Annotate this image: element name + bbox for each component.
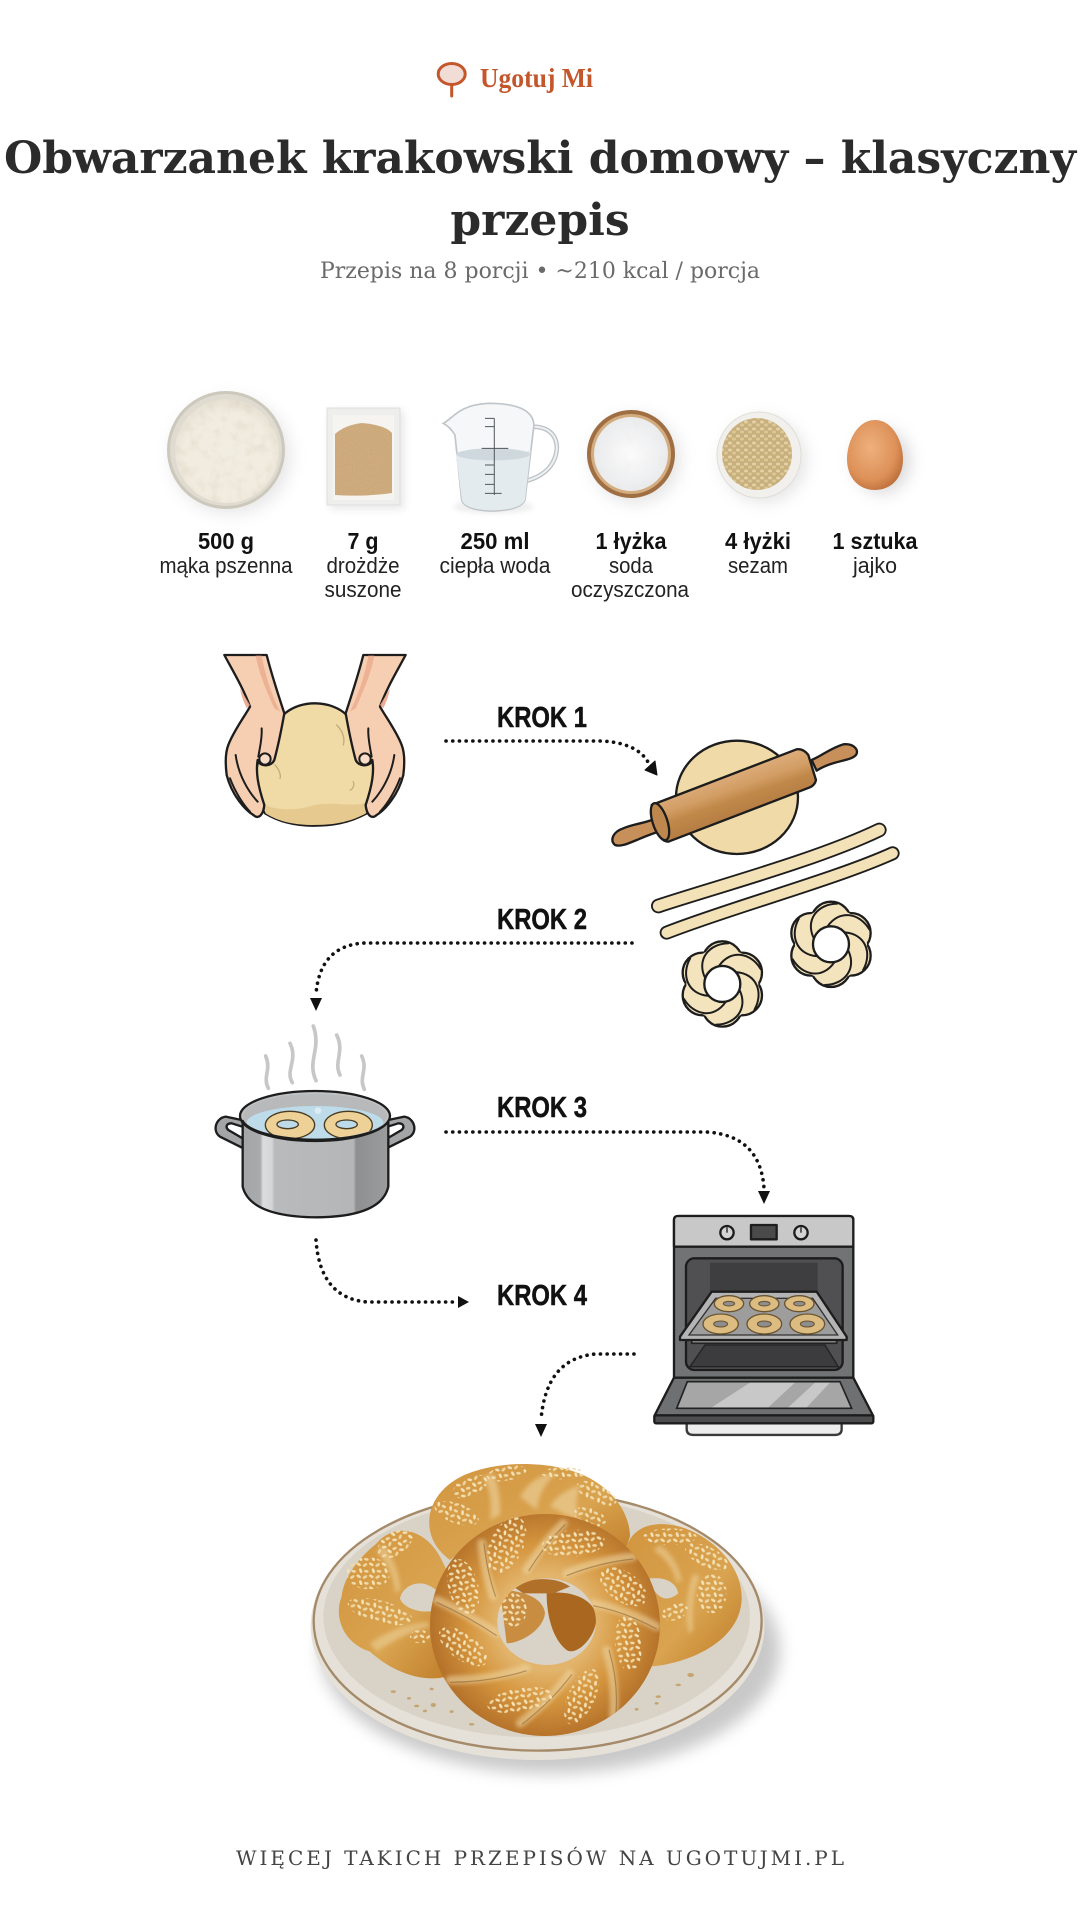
panel: ingredients: [160, 391, 918, 602]
subtitle: Przepis na 8 porcji • ~210 kcal / porcja: [320, 259, 760, 284]
ingredient labels: 1 sztuka: [832, 528, 918, 554]
ingredient labels: soda: [609, 553, 654, 578]
arrow: step 2: [310, 943, 632, 1011]
step label: KROK 3: KROK 3: [497, 1092, 587, 1124]
icon: measuring jug: [443, 403, 557, 513]
bread: left: [339, 1522, 453, 1678]
ingredient labels: 500 g: [198, 528, 254, 554]
ingredient labels: suszone: [324, 577, 402, 602]
ingredient labels: 7 g: [348, 528, 378, 554]
illustration: shaped dough rings: [678, 897, 875, 1032]
arrow: step 3: [446, 1132, 770, 1204]
illustration: rolling pin and dough: [612, 741, 857, 854]
ingredient labels: drożdże: [326, 553, 400, 578]
ingredient labels: 4 łyżki: [725, 528, 791, 554]
step label: KROK 1: KROK 1: [497, 702, 587, 734]
title: przepis: [450, 195, 630, 246]
bread seen through front ring: [500, 1579, 597, 1651]
illustration: hands kneading dough: [224, 655, 406, 826]
icon: baking soda bowl: [587, 410, 680, 503]
icon: flour bowl: [167, 391, 291, 514]
icon: logo spoon pin: [438, 64, 465, 96]
arrow: step 4 to finished dish: [535, 1354, 634, 1437]
step label: KROK 4: KROK 4: [497, 1280, 587, 1312]
ingredient labels: ciepła woda: [440, 553, 551, 578]
steam: [266, 1026, 364, 1089]
logo wordmark: Ugotuj Mi: [480, 63, 593, 93]
bread: right: [627, 1524, 742, 1667]
ingredient labels: mąka pszenna: [160, 553, 293, 578]
icon: yeast sachet: [327, 408, 404, 509]
bread: front: [430, 1511, 660, 1736]
illustration: boiling pot: [216, 1026, 414, 1217]
icon: egg: [847, 420, 910, 493]
ingredient labels: jajko: [852, 553, 897, 578]
ingredient labels: 1 łyżka: [596, 528, 667, 554]
illustration: plate with obwarzanki: [311, 1463, 780, 1773]
logo: [438, 63, 593, 96]
plate: [311, 1492, 765, 1760]
title: [4, 133, 1077, 246]
title: Obwarzanek krakowski domowy – klasyczny: [4, 133, 1077, 184]
ingredient labels: sezam: [728, 553, 788, 578]
icon: sesame bowl: [717, 412, 806, 502]
step label: KROK 2: KROK 2: [497, 904, 587, 936]
arrow: step 1: [446, 741, 657, 775]
footer: WIĘCEJ TAKICH PRZEPISÓW NA UGOTUJMI.PL: [236, 1845, 844, 1870]
loose sesame seeds on plate: [391, 1673, 694, 1726]
illustration: dough ropes: [658, 830, 893, 933]
ingredient labels: [160, 528, 918, 602]
ingredient labels: 250 ml: [460, 528, 530, 554]
illustration: oven: [654, 1216, 873, 1435]
arrow: step 4: [316, 1240, 469, 1308]
bread: back: [429, 1463, 630, 1560]
plate shadow: [320, 1527, 780, 1773]
ingredient labels: oczyszczona: [571, 577, 690, 602]
